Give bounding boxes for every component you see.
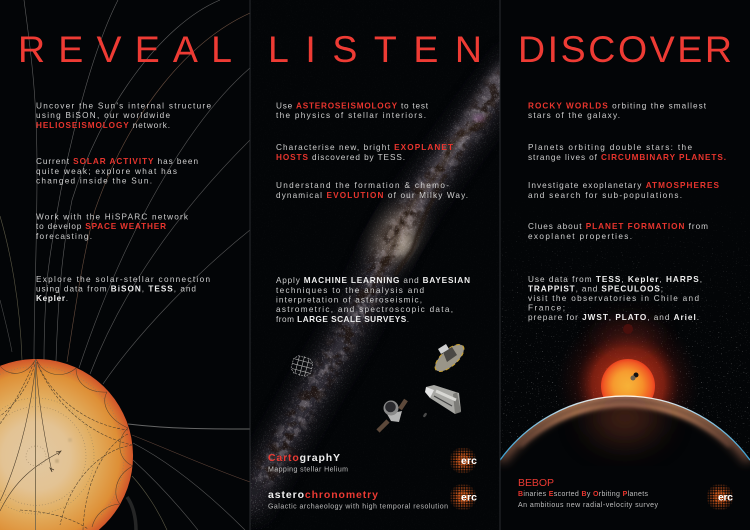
text block: planet formation bbox=[528, 222, 708, 241]
text block: space weather: to develop SPACE WEATHER bbox=[36, 222, 166, 231]
logo: erc: erc bbox=[718, 492, 733, 504]
text block: solar activity: quite weak; explore what has bbox=[36, 167, 177, 176]
text block: asteroseismology bbox=[276, 102, 429, 120]
text block: sun internal structure: HELIOSEISMOLOGY network. bbox=[36, 121, 170, 130]
text block: solar-stellar connection: using data from BiSON, TESS, and bbox=[36, 284, 196, 294]
text block: solar activity: changed inside the Sun. bbox=[36, 176, 152, 186]
text block: exoplanet hosts: Characterise new, bright EXOPLANET bbox=[276, 143, 453, 152]
text block: data and observatories: prepare for JWST, PLATO, and Ariel. bbox=[528, 313, 699, 322]
text block: data and observatories: visit the observatories in Chile and bbox=[528, 294, 699, 303]
icon: gaia spacecraft bbox=[434, 344, 464, 372]
text block: BEBOP: Binaries Escorted By Orbiting Planets bbox=[518, 491, 648, 498]
text block: sun internal structure: Uncover the Sun's internal structure bbox=[36, 102, 211, 110]
panel: reveal bbox=[0, 0, 250, 530]
text block: rocky worlds: ROCKY WORLDS orbiting the smallest bbox=[528, 102, 707, 110]
icon: tess spacecraft bbox=[378, 400, 427, 431]
text block: asterochronometry: asterochronometry bbox=[268, 489, 378, 501]
icon: kepler spacecraft bbox=[425, 385, 461, 414]
text block: evolution: dynamical EVOLUTION of our Milky Way. bbox=[276, 191, 468, 200]
text block: sun internal structure: using BiSON, our worldwide bbox=[36, 111, 170, 120]
text block: evolution: Understand the formation & chemo- bbox=[276, 181, 449, 190]
text block: BEBOP bbox=[518, 477, 658, 509]
text block: machine learning: interpretation of asteroseismic, bbox=[276, 296, 422, 304]
text block: solar activity bbox=[36, 157, 198, 186]
text block: machine learning bbox=[276, 276, 470, 324]
text block: sun internal structure bbox=[36, 102, 211, 128]
text block: evolution bbox=[276, 181, 468, 200]
text block: machine learning: from LARGE SCALE SURVEYS. bbox=[276, 315, 409, 324]
text block: data and observatories: Use data from TESS, Kepler, HARPS, bbox=[528, 275, 702, 284]
panel: listen bbox=[250, 36, 500, 530]
text block: machine learning: techniques to the analysis and bbox=[276, 286, 424, 295]
icon: survey sky grid bbox=[290, 355, 314, 377]
text block: circumbinary planets bbox=[528, 143, 726, 162]
image: milky way bbox=[250, 42, 500, 530]
text block: circumbinary planets: Planets orbiting double stars: the bbox=[528, 143, 692, 152]
text block: machine learning: astrometric, and spectroscopic data, bbox=[276, 305, 453, 314]
text block: planet formation: Clues about PLANET FORMATION from bbox=[528, 222, 708, 231]
text block: rocky worlds: stars of the galaxy. bbox=[528, 111, 620, 120]
text block: solar-stellar connection bbox=[36, 275, 210, 303]
text block: atmospheres bbox=[528, 181, 720, 200]
text block: atmospheres: Investigate exoplanetary ATMOSPHERES bbox=[528, 181, 720, 190]
logo: erc: erc bbox=[461, 455, 477, 467]
star field bbox=[500, 210, 750, 456]
text block: space weather bbox=[36, 212, 189, 241]
logo: erc bbox=[450, 484, 477, 510]
text block: data and observatories bbox=[528, 275, 702, 322]
illustration: sun with acoustic ray paths bbox=[0, 359, 133, 530]
text block: space weather: forecasting. bbox=[36, 232, 92, 241]
illustration: red star and planet limb bbox=[500, 312, 750, 530]
text block: exoplanet hosts: HOSTS discovered by TESS. bbox=[276, 153, 405, 162]
text block: asterochronometry: Galactic archaeology with high temporal resolution bbox=[268, 504, 448, 511]
text block: circumbinary planets: strange lives of CIRCUMBINARY PLANETS. bbox=[528, 153, 726, 162]
heading: LISTEN: LISTEN bbox=[268, 28, 482, 70]
heading: DISCOVER: DISCOVER bbox=[518, 28, 732, 70]
heading: REVEAL: REVEAL bbox=[18, 28, 232, 70]
logo: erc bbox=[707, 484, 733, 510]
text block: rocky worlds bbox=[528, 102, 707, 120]
solar field lines bbox=[0, 0, 250, 530]
text block: CartographY bbox=[268, 454, 348, 473]
logo: erc: erc bbox=[461, 492, 477, 504]
text block: CartographY: CartographY bbox=[268, 452, 340, 464]
text block: asteroseismology: the physics of stellar interiors. bbox=[276, 111, 426, 120]
text block: data and observatories: TRAPPIST, and SPECULOOS; bbox=[528, 284, 663, 294]
text block: CartographY: Mapping stellar Helium bbox=[268, 467, 348, 474]
panel dividers bbox=[250, 0, 500, 530]
panel: discover bbox=[500, 36, 750, 510]
text block: solar activity: Current SOLAR ACTIVITY has been bbox=[36, 157, 198, 166]
text block: atmospheres: and search for sub-populations. bbox=[528, 191, 682, 200]
text block: asteroseismology: Use ASTEROSEISMOLOGY to test bbox=[276, 102, 429, 110]
text block: asterochronometry bbox=[268, 490, 448, 510]
text block: planet formation: exoplanet properties. bbox=[528, 232, 632, 241]
text block: space weather: Work with the HiSPARC network bbox=[36, 212, 189, 222]
text block: BEBOP: An ambitious new radial-velocity survey bbox=[518, 502, 658, 509]
text block: solar-stellar connection: Explore the solar-stellar connection bbox=[36, 275, 210, 284]
text block: machine learning: Apply MACHINE LEARNING and BAYESIAN bbox=[276, 276, 470, 285]
text block: solar-stellar connection: Kepler. bbox=[36, 294, 68, 303]
text block: data and observatories: France; bbox=[528, 304, 565, 312]
text block: exoplanet hosts bbox=[276, 143, 453, 162]
logo: erc bbox=[450, 447, 477, 474]
text block: BEBOP: BEBOP bbox=[518, 477, 554, 489]
